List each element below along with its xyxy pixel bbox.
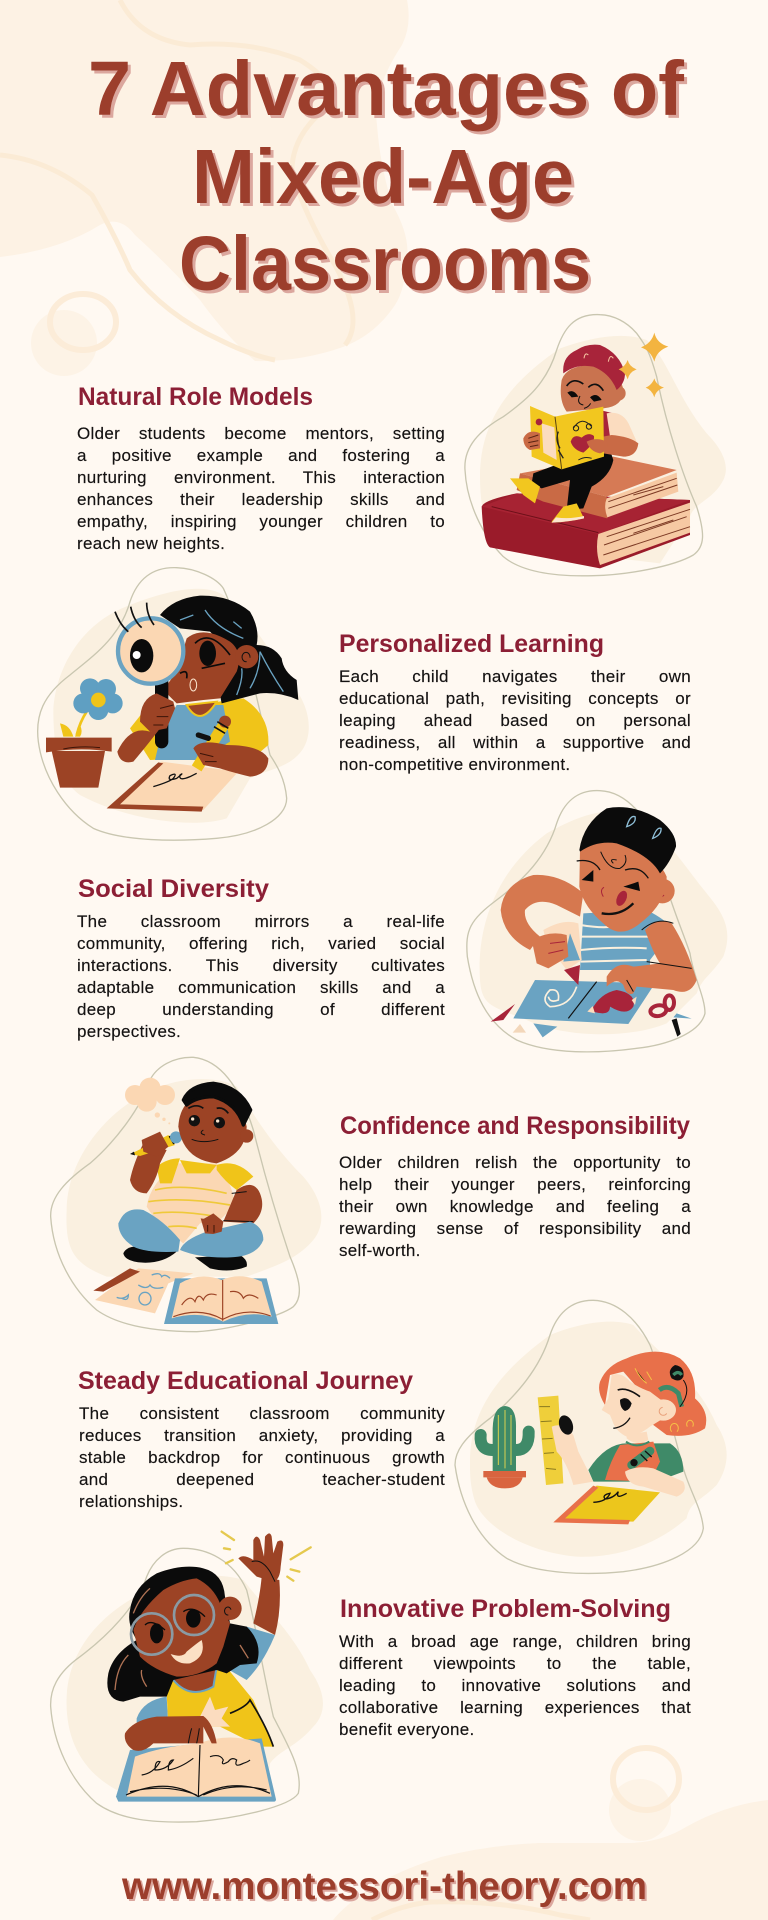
text: personalized learning <box>339 667 691 774</box>
illustration: child raising hand with glasses <box>50 1530 323 1823</box>
text: natural role models: reach new heights. <box>77 534 225 553</box>
text: natural role models: nurturing environment. This interaction <box>77 468 445 487</box>
text: personalized learning: leaping ahead based on personal <box>339 711 691 730</box>
text: confidence and responsibility: their own knowledge and feeling a <box>339 1197 691 1216</box>
heading: Social Diversity: Social Diversity <box>78 875 269 903</box>
text: innovative problem-solving: With a broad age range, children bring <box>339 1632 691 1651</box>
illustration: child cutting and gluing paper <box>466 790 728 1052</box>
heading: Steady Educational Journey: Steady Educational Journey <box>78 1367 413 1395</box>
text: confidence and responsibility: Older children relish the opportunity to <box>339 1153 691 1172</box>
heading: Confidence and Responsibility: Confidence and Responsibility <box>340 1112 690 1140</box>
text: steady educational journey: relationships. <box>79 1492 183 1511</box>
text: social diversity: interactions. This diversity cultivates <box>77 956 445 975</box>
text: social diversity: community, offering rich, varied social <box>77 934 445 953</box>
panel: steady educational journey <box>78 1300 726 1574</box>
illustration: child reading on books <box>464 314 726 576</box>
text: confidence and responsibility <box>339 1153 691 1260</box>
heading: Innovative Problem-Solving: Innovative Problem-Solving <box>340 1595 671 1623</box>
text: innovative problem-solving: different viewpoints to the table, <box>339 1654 691 1673</box>
text: social diversity <box>77 912 445 1041</box>
title: Mixed-Age <box>192 134 574 220</box>
text: social diversity: adaptable communication skills and a <box>77 978 445 997</box>
text: steady educational journey: and deepened teacher-student <box>79 1470 445 1489</box>
title: 7 Advantages of <box>88 46 684 132</box>
heading: Natural Role Models: Natural Role Models <box>78 383 313 411</box>
text: natural role models: Older students become mentors, setting <box>77 424 445 443</box>
illustration: child thinking with pencil <box>50 1056 322 1332</box>
panel: innovative problem-solving <box>50 1530 691 1823</box>
text: innovative problem-solving <box>339 1632 691 1739</box>
text: confidence and responsibility: self-worth. <box>339 1241 421 1260</box>
text: natural role models: empathy, inspiring younger children to <box>77 512 445 531</box>
text: steady educational journey: reduces transition anxiety, providing a <box>79 1426 445 1445</box>
text: natural role models: enhances their leadership skills and <box>77 490 445 509</box>
panel: personalized learning <box>37 567 691 841</box>
illustration: child with ruler and cactus <box>454 1300 726 1574</box>
panel: natural role models <box>77 314 726 576</box>
title: Classrooms <box>179 221 591 307</box>
text: innovative problem-solving: collaborative learning experiences that <box>339 1698 691 1717</box>
panel: social diversity <box>77 790 728 1052</box>
text: social diversity: deep understanding of different <box>77 1000 445 1019</box>
text: steady educational journey <box>79 1404 445 1511</box>
text: innovative problem-solving: benefit everyone. <box>339 1720 475 1739</box>
panel: confidence and responsibility <box>50 1056 691 1332</box>
text: steady educational journey: The consistent classroom community <box>79 1404 445 1423</box>
text: social diversity: perspectives. <box>77 1022 181 1041</box>
heading: Personalized Learning: Personalized Learning <box>339 630 604 658</box>
title <box>88 46 688 307</box>
text: steady educational journey: stable backdrop for continuous growth <box>79 1448 445 1467</box>
text: confidence and responsibility: help their younger peers, reinforcing <box>339 1175 691 1194</box>
illustration: child with magnifying glass <box>37 567 309 841</box>
text: personalized learning: Each child navigates their own <box>339 667 691 686</box>
text: social diversity: The classroom mirrors a real-life <box>77 912 445 931</box>
text: personalized learning: non-competitive environment. <box>339 755 570 774</box>
text: natural role models <box>77 424 445 553</box>
text: natural role models: a positive example and fostering a <box>77 446 445 465</box>
text: innovative problem-solving: leading to innovative solutions and <box>339 1676 691 1695</box>
text: confidence and responsibility: rewarding sense of responsibility and <box>339 1219 691 1238</box>
footer website: www.montessori-theory.com <box>121 1865 647 1908</box>
text: personalized learning: readiness, all within a supportive and <box>339 733 691 752</box>
text: personalized learning: educational path, revisiting concepts or <box>339 689 691 708</box>
